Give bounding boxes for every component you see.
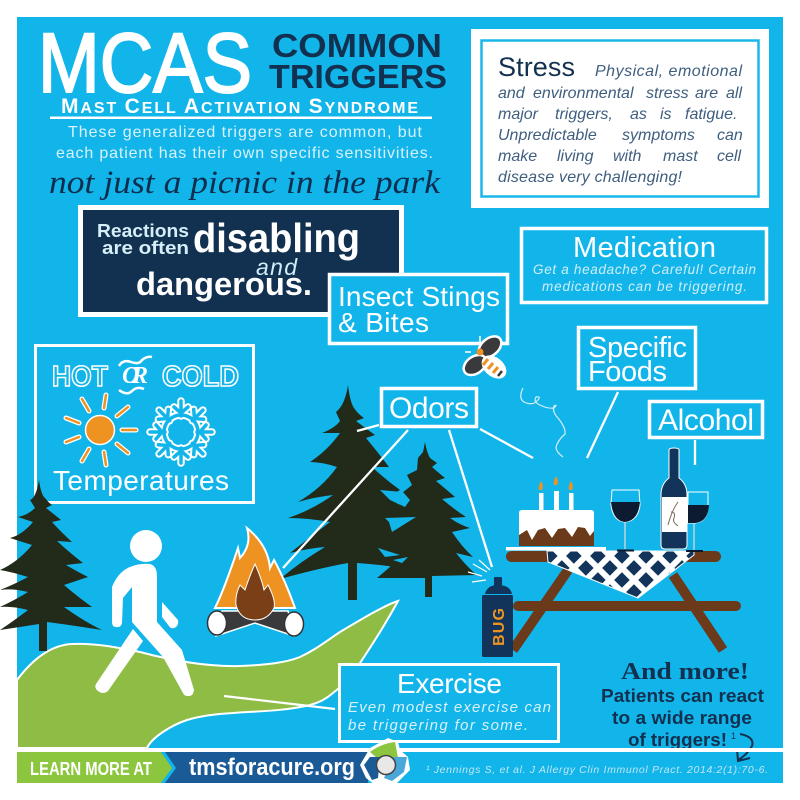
panel: stress: all (726, 85, 742, 102)
icon: small pine tree (377, 442, 477, 597)
tablecloth (547, 551, 694, 598)
panel: stress: Unpredictable (498, 127, 597, 144)
panel: disabling and dangerous: Reactions (97, 221, 189, 241)
picnic table (506, 551, 741, 650)
gaps between trees (378, 490, 416, 563)
panel: medication: Get a headache? Careful! Certain (533, 262, 756, 277)
panel: medication (522, 228, 766, 302)
panel: stress: disease very challenging! (498, 169, 683, 186)
panel: insect stings and bites (330, 274, 508, 344)
title: Common Triggers: COMMON (272, 27, 442, 64)
panel: stress: can (717, 127, 743, 144)
icon: sun (66, 395, 136, 465)
icon: birthday cake (506, 476, 606, 550)
panel: specific foods (578, 328, 696, 388)
panel: stress: major (498, 106, 539, 123)
panel: hot or cold temperatures: HOT (52, 361, 108, 393)
panel: stress: as (630, 106, 647, 123)
icon: left pine tree (0, 480, 102, 651)
panel: hot or cold temperatures (36, 346, 254, 502)
panel: exercise (340, 664, 558, 742)
panel: stress: Physical, emotional (595, 63, 742, 80)
panel: stress: stress (646, 85, 689, 102)
icon: large pine tree (280, 385, 427, 600)
title: MCAS: MCAS (38, 16, 252, 110)
panel: exercise: Even modest exercise can (348, 699, 551, 716)
icon: bug spray can (468, 560, 513, 657)
panel: stress: and (498, 85, 526, 102)
panel: stress: cell (717, 148, 741, 165)
panel: specific foods: Foods (588, 356, 667, 388)
icon: logo (360, 738, 410, 784)
panel: hot or cold temperatures: COLD (162, 361, 239, 393)
footer: learn more banner: LEARN MORE AT (30, 759, 152, 779)
panel: disabling and dangerous: are often (102, 238, 189, 258)
panel: odors: Odors (389, 392, 469, 425)
panel: stress: are (695, 85, 718, 102)
callout: and more: And more! (621, 659, 749, 685)
panel: stress: environmental (533, 85, 634, 102)
icon: snowflake (150, 401, 212, 463)
panel: stress (471, 29, 769, 208)
panel: hot or cold temperatures: Temperatures (53, 465, 229, 496)
footer: learn more banner (17, 748, 783, 783)
intro text: These generalized triggers are common, but (68, 124, 423, 141)
panel: stress: living (557, 148, 594, 165)
icon: wine glass right (686, 492, 709, 551)
panel: alcohol: Alcohol (658, 404, 754, 437)
panel: disabling and dangerous: dangerous. (136, 266, 312, 302)
panel: stress: Stress (498, 52, 575, 82)
callout: and more: to a wide range (612, 708, 752, 728)
callout: and more: of triggers! (628, 730, 727, 750)
icon: walking person (95, 530, 194, 696)
green hill path (17, 601, 398, 748)
title: Common Triggers: TRIGGERS (269, 58, 447, 95)
panel: stress: make (498, 148, 537, 165)
panel: insect stings and bites: & Bites (338, 307, 429, 338)
icon: wine glass left (611, 490, 640, 550)
icon: campfire (208, 528, 304, 636)
panel: stress: mast (663, 148, 698, 165)
panel: disabling and dangerous: disabling (193, 215, 360, 261)
panel: stress: fatigue. (685, 106, 737, 123)
subtitle: Mast Cell Activation Syndrome: MAST CELL ACTIVATION SYNDROME (61, 95, 418, 118)
title: Common Triggers (269, 27, 447, 95)
callout lines (224, 392, 695, 709)
arrow (737, 734, 752, 761)
callout: and more: Patients can react (601, 686, 764, 706)
callout: and more (601, 659, 764, 761)
panel: stress: is (660, 106, 672, 123)
panel: exercise: be triggering for some. (348, 717, 528, 734)
footer: website banner: tmsforacure.org (189, 754, 355, 781)
panel: specific foods: Specific (588, 332, 687, 364)
intro text (56, 124, 433, 162)
script tagline: not just a picnic in the park (49, 165, 441, 201)
panel: hot or cold temperatures: OR (122, 363, 148, 389)
icon: smoke (521, 388, 565, 457)
panel: stress: with (613, 148, 642, 165)
panel: stress: triggers, (555, 106, 613, 123)
intro text: each patient has their own specific sensitivities. (56, 145, 433, 162)
icon: wine bottle (661, 448, 687, 549)
panel: medication: medications can be triggering. (542, 279, 747, 294)
panel: disabling and dangerous (80, 208, 402, 314)
icon: bug spray can: BUG (491, 608, 508, 646)
callout: and more: 1 (731, 731, 736, 741)
panel: insect stings and bites: Insect Stings (338, 281, 500, 312)
panel: exercise: Exercise (397, 668, 502, 699)
citation: ¹ Jennings S, et al. J Allergy Clin Immunol Pract. 2014:2(1):70-6. (426, 764, 768, 776)
panel: stress: symptoms (622, 127, 695, 144)
icon: bee (460, 332, 509, 382)
panel: medication: Medication (573, 232, 716, 264)
panel: disabling and dangerous: and (256, 254, 298, 280)
